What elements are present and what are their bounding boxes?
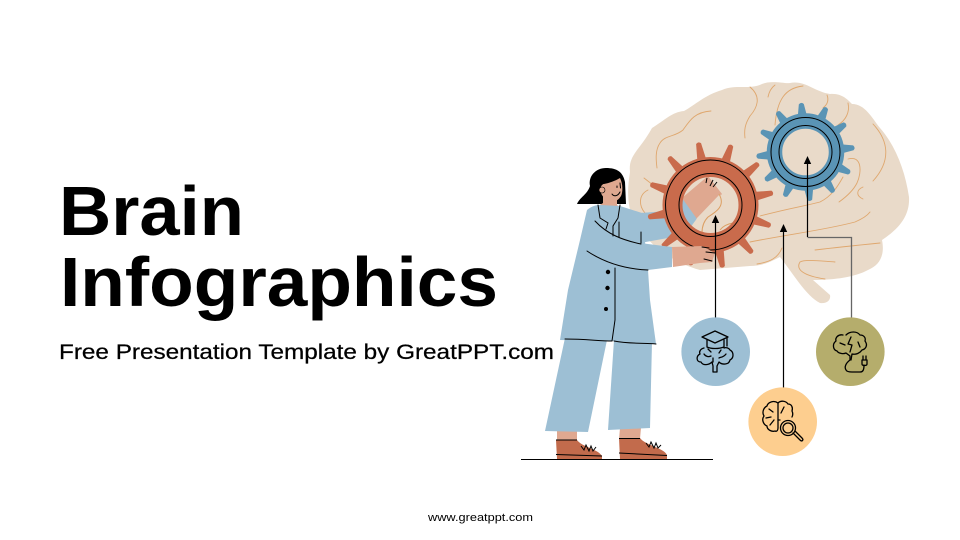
title: Brain <box>59 172 244 250</box>
hand on gear <box>672 246 715 267</box>
ankles <box>557 428 641 441</box>
blue gear <box>756 103 855 201</box>
shoe lines <box>556 438 667 456</box>
title: Infographics <box>60 243 498 321</box>
jacket lines <box>565 205 715 344</box>
connector: blue circle <box>712 215 719 318</box>
ear <box>599 187 605 193</box>
connector: yellow circle <box>780 224 787 388</box>
jacket <box>560 205 656 344</box>
person <box>521 168 715 460</box>
neck <box>598 195 620 223</box>
hair <box>577 168 626 204</box>
right shoe <box>619 438 667 459</box>
jacket sleeve <box>587 222 672 270</box>
brain wrinkles <box>640 85 886 279</box>
title <box>59 172 498 321</box>
circle icon: brain with plug <box>816 317 885 386</box>
trousers <box>545 338 652 432</box>
person far arm and hand seen through the gear <box>640 176 733 243</box>
red gear <box>647 142 774 268</box>
connector: olive circle <box>804 156 852 318</box>
subtitle: Free Presentation Template by GreatPPT.com <box>59 341 554 364</box>
face <box>600 178 622 202</box>
circle icon: brain with graduation cap <box>681 317 750 386</box>
buttons <box>606 270 610 274</box>
ground line <box>521 458 713 460</box>
face lines <box>612 183 620 196</box>
circle icon: brain with magnifying glass <box>748 387 817 456</box>
footer website: www.greatppt.com <box>427 512 533 524</box>
left shoe <box>556 440 602 459</box>
brain <box>628 82 909 303</box>
